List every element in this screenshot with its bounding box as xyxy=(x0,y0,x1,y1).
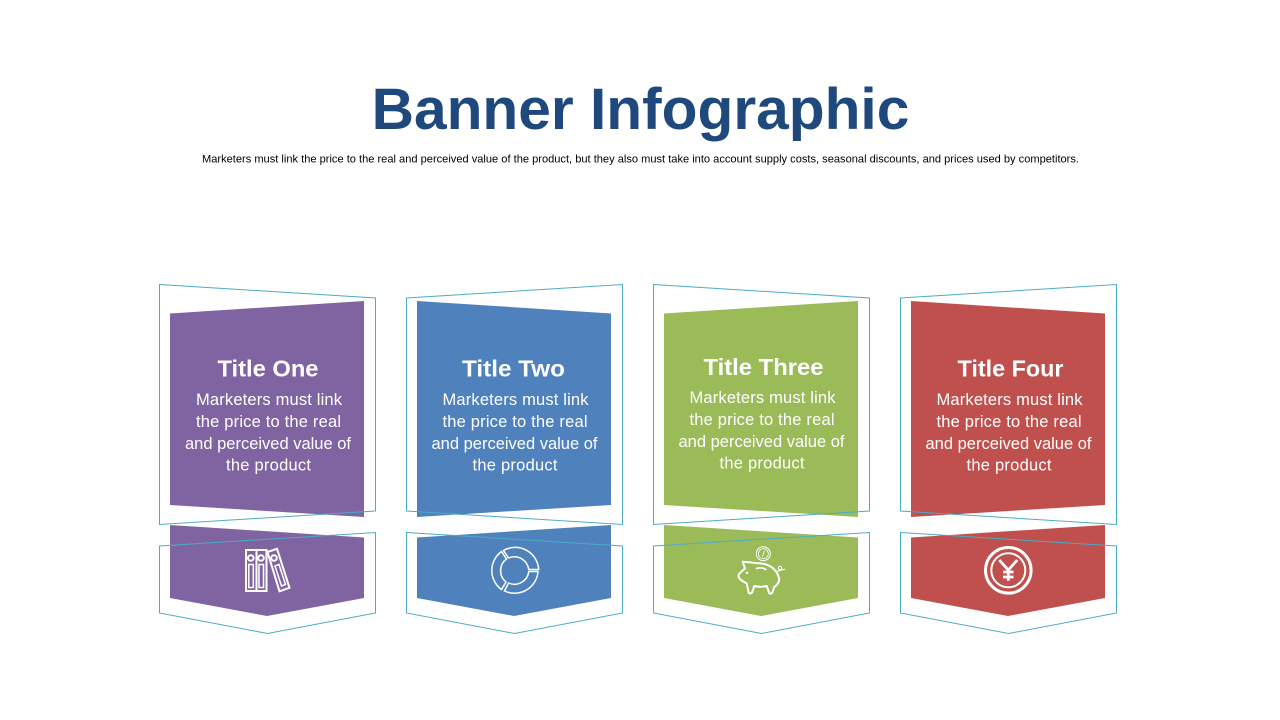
upper banner fill xyxy=(911,301,1105,517)
panel: title one xyxy=(160,284,376,634)
lower banner outline xyxy=(654,532,870,634)
upper banner fill xyxy=(170,301,364,517)
title: Banner Infographic xyxy=(372,77,909,142)
upper banner outline xyxy=(160,284,376,524)
body text xyxy=(432,391,598,474)
body text: the price to the real xyxy=(690,411,834,429)
upper banner outline xyxy=(654,284,870,524)
icon: yen coin xyxy=(986,548,1031,593)
upper banner outline xyxy=(900,284,1116,524)
lower banner outline xyxy=(160,532,376,634)
body text: the product xyxy=(966,456,1052,474)
lower banner fill xyxy=(911,525,1105,616)
body text: and perceived value of xyxy=(678,433,845,451)
lower banner fill xyxy=(170,525,364,616)
body text: the price to the real xyxy=(196,413,341,431)
panel: title two xyxy=(406,284,622,634)
body text: the product xyxy=(226,456,311,474)
body text: Marketers must link xyxy=(442,391,589,409)
lower banner fill xyxy=(664,525,858,616)
icon: piggy bank xyxy=(738,547,784,594)
lower banner fill xyxy=(417,525,611,616)
body text: Marketers must link xyxy=(690,389,836,407)
heading: Title One xyxy=(218,356,318,382)
heading: Title Four xyxy=(958,356,1064,382)
subtitle: Marketers must link the price to the real and perceived value of the product, but they also must take into account supply costs, seasonal discounts, and prices used by competitors. xyxy=(202,154,1079,166)
icon: binders xyxy=(246,549,290,591)
body text: the price to the real xyxy=(936,413,1082,431)
body text: the product xyxy=(472,456,558,474)
body text xyxy=(185,391,351,474)
body text xyxy=(926,391,1092,474)
panel: title three xyxy=(654,284,870,634)
upper banner outline xyxy=(406,284,622,524)
lower banner outline xyxy=(406,532,622,634)
body text: and perceived value of xyxy=(432,435,598,453)
body text: the product xyxy=(720,454,805,472)
body text: and perceived value of xyxy=(926,435,1092,453)
heading: Title Three xyxy=(704,354,824,380)
icon: donut chart xyxy=(492,547,539,593)
body text: the price to the real xyxy=(442,413,588,431)
heading: Title Two xyxy=(462,356,565,382)
panel: title four xyxy=(900,284,1116,634)
body text: and perceived value of xyxy=(185,435,351,453)
upper banner fill xyxy=(664,301,858,517)
body text: Marketers must link xyxy=(196,391,343,409)
body text: Marketers must link xyxy=(936,391,1083,409)
upper banner fill xyxy=(417,301,611,517)
body text xyxy=(678,389,845,472)
lower banner outline xyxy=(900,532,1116,634)
